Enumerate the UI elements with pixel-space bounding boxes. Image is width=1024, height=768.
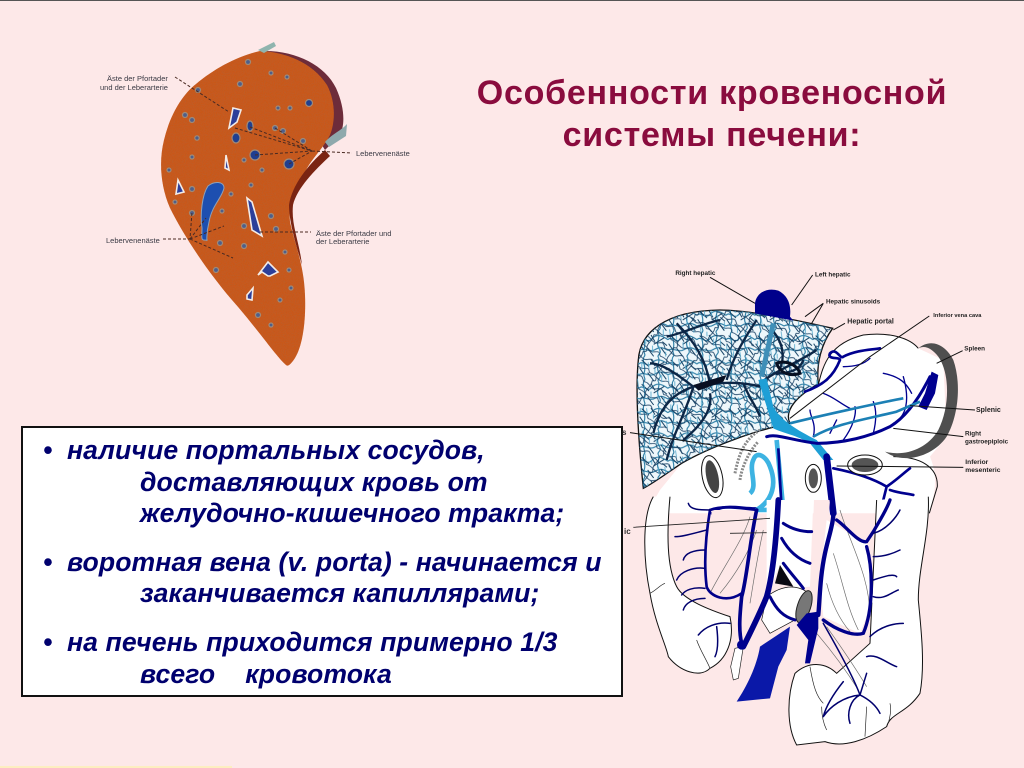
- text box: liver blood supply facts: воротная вена (v. porta) - начинается и: [67, 547, 602, 577]
- text box: liver blood supply facts: заканчивается капиллярами;: [140, 578, 539, 608]
- liver outline: [637, 310, 833, 488]
- colon ring lower: [792, 589, 815, 625]
- descending colon and sigmoid: [789, 497, 928, 745]
- liver labels: Äste der Pfortader und: [316, 229, 391, 238]
- inferior vena cava lower: [737, 627, 790, 702]
- diagram labels upper: mesenteric: [965, 467, 1001, 474]
- colon inner folds: [650, 583, 891, 737]
- leader lines: [633, 518, 770, 533]
- bullet three: •: [43, 627, 52, 657]
- vein in colon: [778, 448, 782, 510]
- title: системы печени:: [563, 116, 861, 154]
- vessels with white borders: [176, 108, 278, 300]
- small vessel spots: [167, 60, 312, 327]
- hepatic capillary network: [637, 310, 837, 490]
- gallbladder grey shading: [735, 430, 760, 480]
- diagram labels upper: gastroepiploic: [965, 438, 1009, 445]
- top edge line: [0, 0, 1024, 1]
- text box: liver blood supply facts: на печень приходится примерно 1/3: [67, 627, 557, 657]
- small cecum: [731, 647, 743, 680]
- text box: liver blood supply facts: доставляющих кровь от: [140, 467, 488, 497]
- mesentery streaks: [710, 510, 870, 690]
- colon ring left: [698, 454, 727, 500]
- spleen vein mass: [918, 372, 938, 410]
- bottom accent strip: [0, 766, 232, 768]
- superior mesenteric light vessel: [750, 440, 783, 510]
- pink mesentery gaps: [707, 500, 830, 615]
- liver body: [161, 51, 334, 366]
- text box: liver blood supply facts: наличие портальных сосудов,: [67, 435, 485, 465]
- liver labels: der Leberarterie: [316, 237, 369, 246]
- ascending colon: [645, 497, 731, 673]
- liver cross-section illustration: [100, 42, 410, 366]
- colon side branches: [675, 503, 903, 723]
- title: Особенности кровеносной: [477, 74, 947, 112]
- inferior mesenteric trunk base: [797, 612, 818, 663]
- diagram labels upper: Inferior: [965, 459, 989, 466]
- central white mesentery: [820, 520, 873, 633]
- liver top vessel stub: [258, 42, 276, 53]
- organ diagram: lower part intestines: [633, 497, 928, 745]
- liver labels: Lebervenenäste: [356, 149, 410, 158]
- right colon contour: [893, 457, 937, 513]
- main mesenteric veins: [705, 500, 890, 647]
- abdominal white base: [647, 334, 947, 513]
- organ diagram: upper part with liver stomach spleen: [630, 270, 1009, 513]
- diagram labels upper: Left hepatic: [815, 271, 851, 278]
- text box: liver blood supply facts: всего кровотока: [140, 659, 392, 689]
- liver labels: und der Leberarterie: [100, 83, 168, 92]
- diagram labels upper: Inferior vena cava: [933, 313, 982, 319]
- left-side label fragment two: ic: [624, 527, 631, 536]
- diagram labels upper: Hepatic sinusoids: [826, 298, 881, 305]
- liver shadow edge: [289, 150, 330, 265]
- central white column: [767, 500, 813, 597]
- lesion shadow black: [775, 565, 793, 587]
- portal vein trunk light blue: [758, 378, 833, 460]
- stomach contour: [818, 334, 918, 385]
- liver labels: [100, 74, 410, 246]
- small central panel: [762, 587, 807, 633]
- liver labels: Äste der Pfortader: [107, 74, 168, 83]
- spleen: [885, 343, 958, 458]
- inferior vena cava top: [755, 290, 793, 321]
- text box: liver blood supply facts: желудочно-кишечного тракта;: [140, 498, 564, 528]
- diagram labels upper: [675, 270, 1009, 474]
- left-side label fragment one: s: [622, 428, 626, 437]
- splenic and gastric veins: [712, 348, 930, 513]
- colon ring middle: [805, 464, 821, 492]
- diagram labels upper: Right: [965, 430, 982, 437]
- cecum spot: [737, 640, 746, 650]
- colon ring right: [848, 455, 882, 475]
- bullet two: •: [43, 547, 52, 577]
- leader lines: [630, 275, 975, 467]
- liver rear edge: [262, 51, 343, 150]
- diagram labels upper: Spleen: [964, 346, 985, 353]
- liver labels: Lebervenenäste: [106, 236, 160, 245]
- diagram labels upper: Right hepatic: [675, 270, 716, 277]
- text box: liver blood supply facts: [21, 426, 623, 697]
- splenic light branch: [790, 398, 920, 437]
- bullet one: •: [43, 435, 52, 465]
- diagram labels upper: Hepatic portal: [847, 319, 894, 326]
- large blue vein: [201, 182, 224, 241]
- title: [477, 74, 947, 154]
- dashed leader lines: [163, 77, 352, 258]
- liver right vessel stub: [325, 124, 347, 147]
- diagram labels upper: Splenic: [976, 407, 1001, 414]
